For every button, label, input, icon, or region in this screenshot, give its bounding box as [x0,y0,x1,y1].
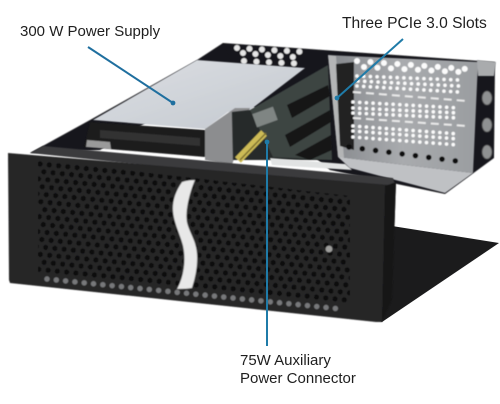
leader: auxiliary connector [265,140,269,346]
S logo [173,180,197,289]
top rear ventilation holes [237,48,306,64]
base plate [372,226,499,322]
rear grommets [482,91,492,159]
label: auxiliary power connector: 75W Auxiliary [240,352,331,369]
bottom row of light holes [47,279,341,309]
label: auxiliary power connector: Power Connector [240,370,356,387]
chassis rear and side walls [30,43,495,194]
yellow power wires [238,133,266,160]
slot bracket cage [270,55,496,193]
circuit board with PCIe slots [232,65,332,160]
power supply [84,60,305,165]
indicator light [326,246,332,252]
slot perforations [349,61,467,162]
leader: PCIe slots [335,39,403,100]
label: PCIe slots: Three PCIe 3.0 Slots [342,15,487,32]
leader: power supply [88,47,175,105]
label: power supply: 300 W Power Supply [20,23,161,40]
front panel [8,146,396,322]
